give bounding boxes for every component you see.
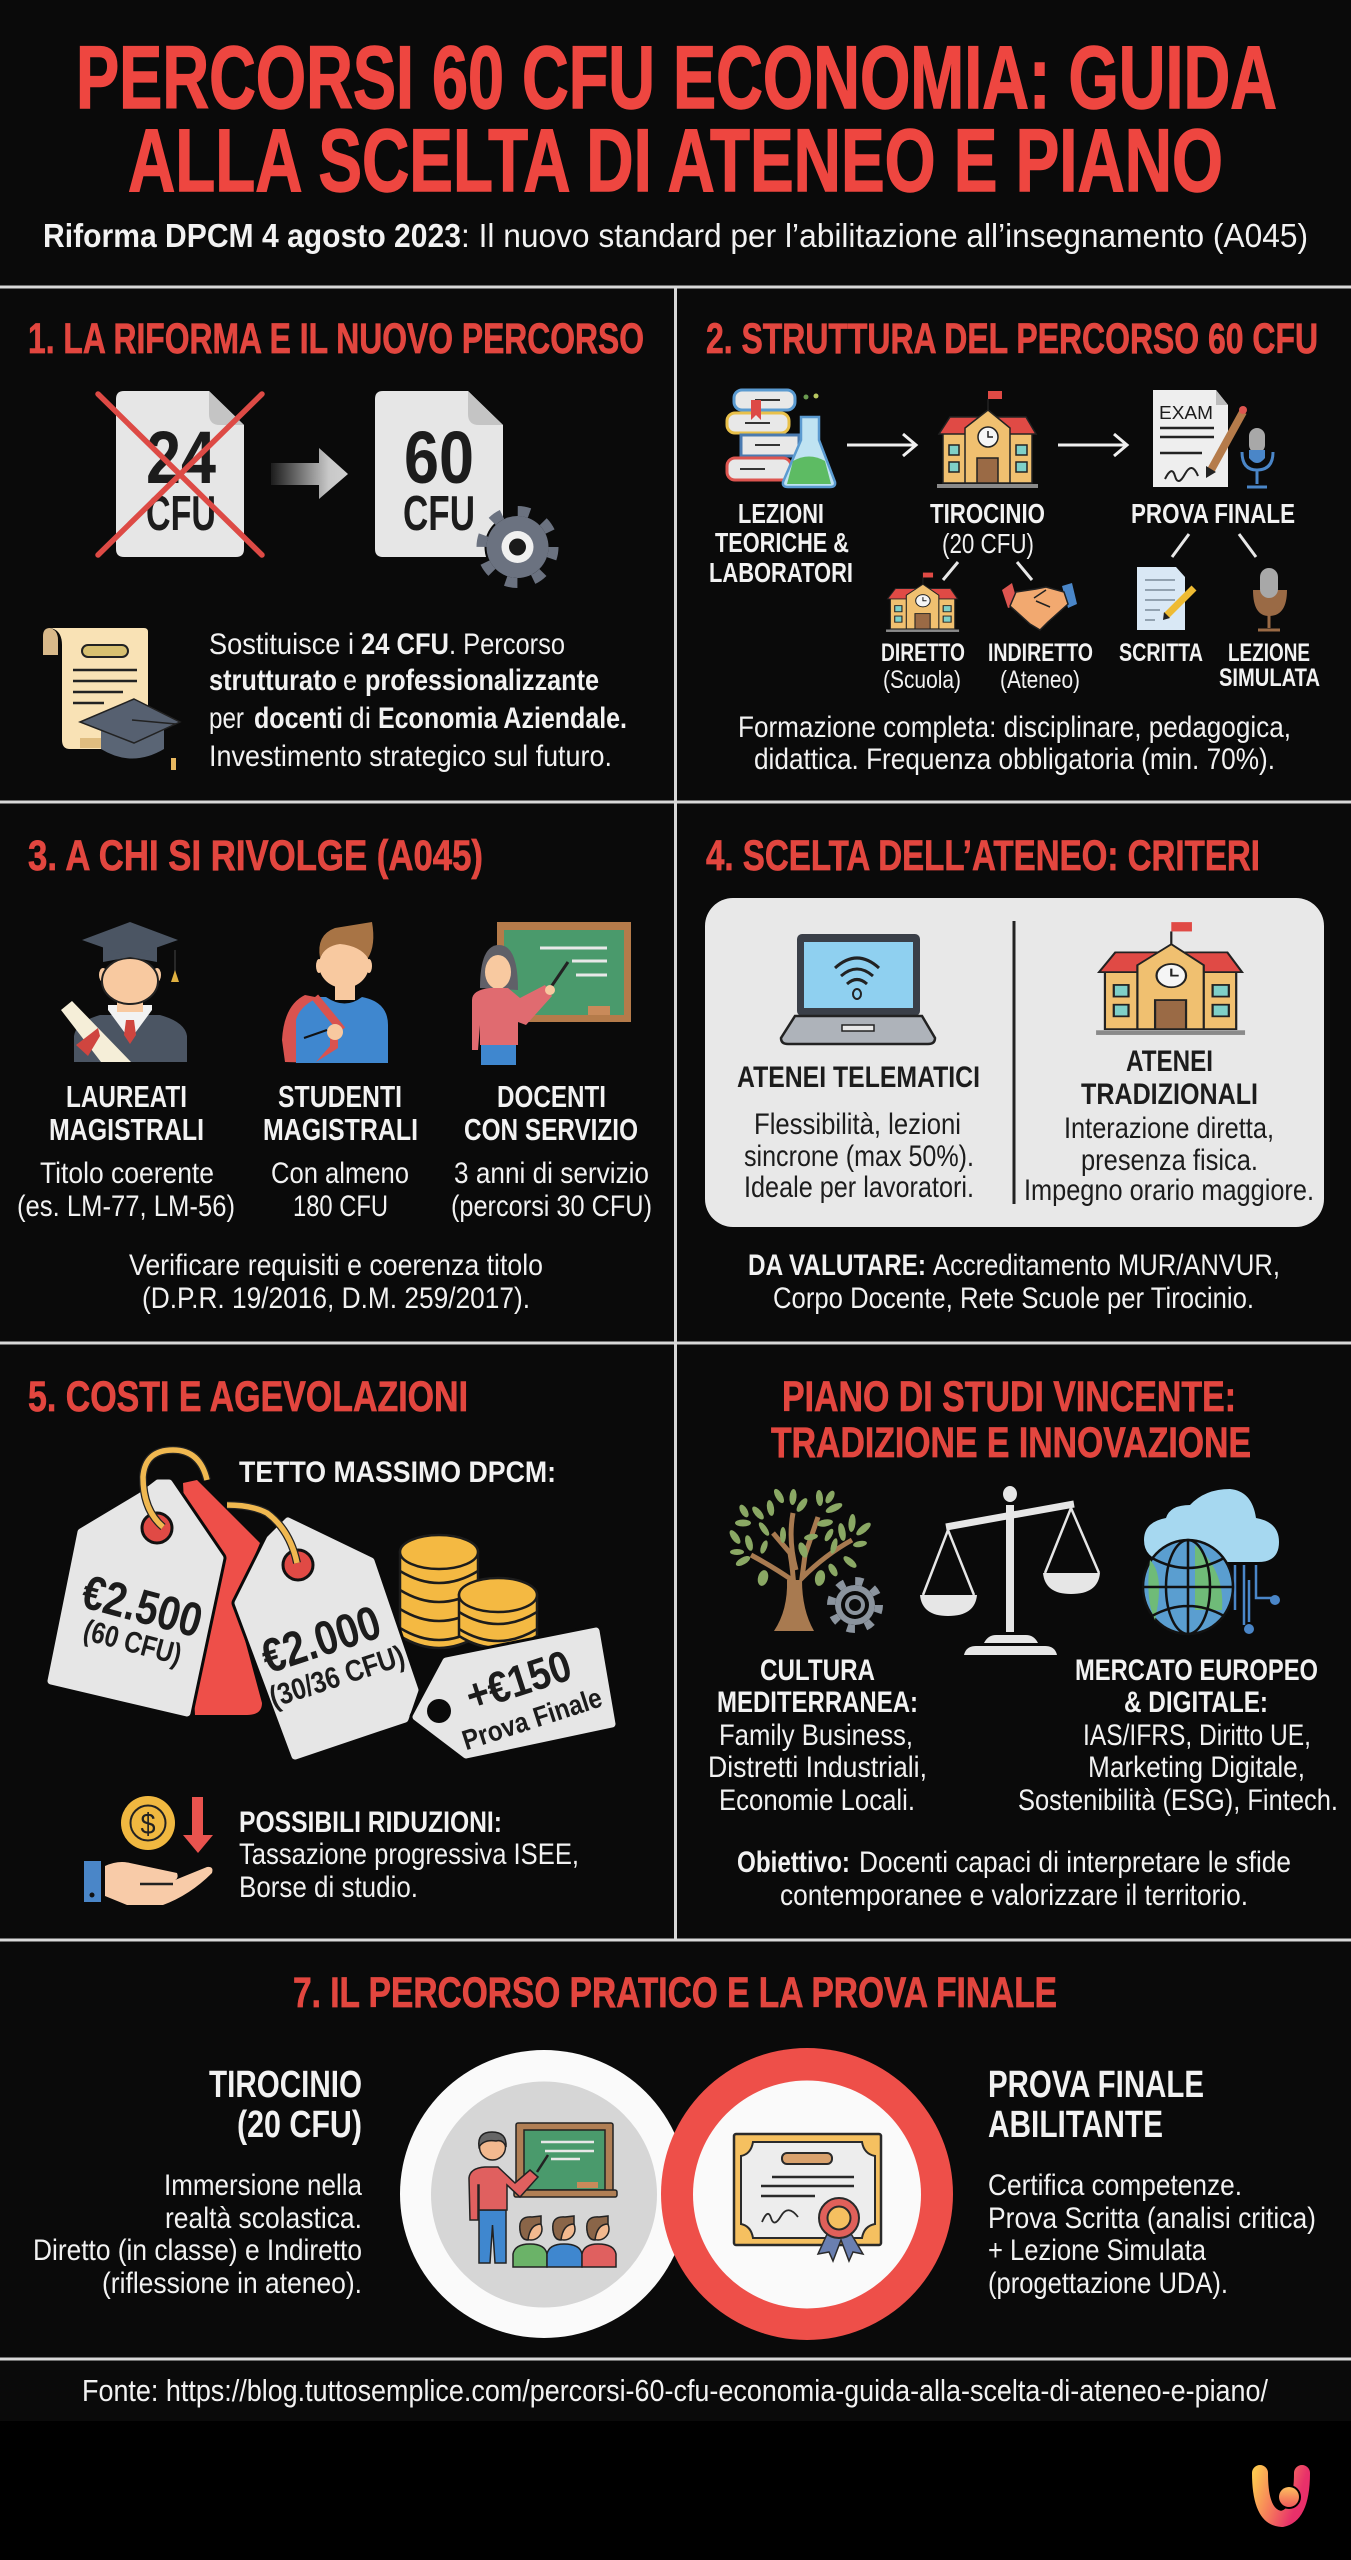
icon: coin, arrow, hand (84, 1796, 213, 1905)
heading 5: 5. COSTI E AGEVOLAZIONI (28, 1373, 468, 1421)
column: mercato europeo: Marketing Digitale, (1088, 1751, 1305, 1784)
persona: studenti: Con almeno (271, 1157, 409, 1190)
option: telematici: sincrone (max 50%). (744, 1140, 974, 1173)
label: lezioni (709, 498, 853, 588)
text: tirocinio: Immersione nella (164, 2169, 362, 2202)
arrow (271, 448, 348, 499)
text: prova finale abilitante: (progettazione UDA). (988, 2267, 1228, 2300)
option: tradizionali: ATENEI (1126, 1045, 1213, 1078)
note: da valutare (748, 1249, 1280, 1315)
persona: laureati (17, 1079, 235, 1223)
icon: tree and gear (728, 1487, 879, 1631)
label: prova finale: PROVA FINALE (1131, 498, 1295, 529)
text block: strutturato (209, 664, 337, 697)
heading 3: 3. A CHI SI RIVOLGE (A045) (28, 832, 483, 880)
text: riduzioni: Tassazione progressiva ISEE, (239, 1838, 579, 1871)
logo (1260, 2473, 1302, 2519)
text: prova finale abilitante: Prova Scritta (analisi critica) (988, 2202, 1316, 2235)
label: lezione simulata: LEZIONE (1228, 639, 1310, 667)
persona: laureati: LAUREATI (66, 1079, 187, 1114)
note: da valutare: Corpo Docente, Rete Scuole per Tirocinio. (773, 1282, 1254, 1315)
column: cultura mediterranea: Distretti Industriali, (708, 1751, 927, 1784)
heading 7: 7. IL PERCORSO PRATICO E LA PROVA FINALE (293, 1969, 1057, 2017)
persona: studenti (263, 1079, 418, 1223)
persona: docenti (451, 1079, 652, 1223)
text: prova finale abilitante: + Lezione Simulata (988, 2234, 1206, 2267)
icon: teacher and students (469, 2123, 617, 2267)
label: indiretto: (Ateneo) (1000, 666, 1080, 694)
icon: crossed 24 CFU document (98, 391, 262, 557)
text: prova finale abilitante: PROVA FINALE (988, 2064, 1204, 2106)
persona: studenti: STUDENTI (278, 1079, 402, 1114)
text block: 24 CFU (361, 628, 449, 661)
tag: red back (183, 1480, 262, 1715)
option: tradizionali: TRADIZIONALI (1081, 1078, 1258, 1111)
card: comparison (705, 898, 1324, 1227)
persona: docenti: 3 anni di servizio (454, 1157, 649, 1190)
icon: crossed 24 CFU document: 24 (146, 416, 216, 499)
tag: 2500: (60 CFU) (80, 1614, 185, 1672)
label: diretto: DIRETTO (881, 639, 965, 667)
text: tirocinio: (20 CFU) (237, 2104, 362, 2146)
option: tradizionali: presenza fisica. (1081, 1144, 1258, 1177)
panel: 7 percorso pratico (33, 1969, 1316, 2340)
tag: 150: Prova Finale (458, 1682, 606, 1756)
text block: . Percorso (449, 628, 565, 661)
icon: small document and pencil (1137, 567, 1194, 630)
arrow (1058, 434, 1127, 456)
column: cultura mediterranea: MEDITERRANEA: (717, 1686, 918, 1719)
label: lezioni: LABORATORI (709, 557, 853, 588)
panel: 3 a chi si rivolge (17, 832, 652, 1315)
note: da valutare: Accreditamento MUR/ANVUR, (933, 1249, 1280, 1282)
icon: laptop with wifi (781, 934, 935, 1044)
text block: di (349, 702, 371, 735)
icon: exam sheet, pencil, microphone: EXAM (1159, 403, 1213, 423)
note: obiettivo (737, 1846, 1291, 1912)
column: cultura mediterranea: CULTURA (760, 1654, 875, 1687)
tag: 2000 (227, 1505, 415, 1756)
icon: graduate (61, 922, 187, 1062)
text block: docenti (254, 702, 343, 735)
text: prova finale abilitante: Certifica competenze. (988, 2169, 1242, 2202)
icon: crossed 24 CFU document: CFU (146, 487, 216, 541)
icon: university (1096, 922, 1245, 1035)
panel: 4 scelta ateneo (705, 832, 1324, 1315)
tag: 150 (416, 1631, 612, 1756)
note: obiettivo: Docenti capaci di interpretare le sfide (859, 1846, 1291, 1879)
text block: per (209, 702, 244, 735)
persona: laureati: MAGISTRALI (49, 1112, 204, 1147)
icon: 60 CFU document with gear (375, 391, 554, 583)
icon: coins (400, 1535, 537, 1648)
label: scritta: SCRITTA (1119, 639, 1203, 667)
heading 6 (771, 1373, 1251, 1467)
icon: small school (886, 573, 959, 632)
column: cultura mediterranea: Family Business, (719, 1719, 913, 1752)
note: da valutare: DA VALUTARE: (748, 1249, 926, 1282)
text block: Investimento strategico sul futuro. (209, 740, 612, 773)
tag: 2000: €2.000 (255, 1596, 387, 1684)
label: lezioni: LEZIONI (738, 498, 824, 529)
icon: books and flask (727, 390, 835, 487)
subtitle: : Il nuovo standard per l’abilitazione all’insegnamento (A045) (461, 217, 1308, 254)
text: tirocinio: TIROCINIO (209, 2064, 362, 2106)
icon: 60 CFU document with gear: 60 (404, 416, 474, 499)
persona: laureati: Titolo coerente (40, 1157, 214, 1190)
icon: student (282, 922, 388, 1063)
icon: certificate (734, 2134, 881, 2261)
label: diretto (881, 639, 965, 694)
text: prova finale abilitante (988, 2064, 1316, 2300)
text: prova finale abilitante: ABILITANTE (988, 2104, 1163, 2146)
tag: 2000: (30/36 CFU) (265, 1640, 409, 1714)
option: telematici (737, 1061, 980, 1204)
column: mercato europeo: & DIGITALE: (1124, 1686, 1268, 1719)
label: lezione simulata (1219, 639, 1320, 692)
panel: 2 struttura (706, 315, 1320, 776)
icon: coin, arrow, hand: $ (140, 1808, 156, 1841)
title (76, 27, 1277, 210)
persona: docenti: DOCENTI (497, 1079, 606, 1114)
option: tradizionali (1024, 1045, 1314, 1207)
label: tirocinio: (20 CFU) (942, 528, 1034, 559)
persona: docenti: (percorsi 30 CFU) (451, 1190, 652, 1223)
label: tirocinio (930, 498, 1045, 559)
icon: diploma and cap (43, 628, 180, 770)
text block (209, 628, 627, 773)
panel: 1 la riforma (28, 315, 644, 773)
persona: laureati: (es. LM-77, LM-56) (17, 1190, 235, 1223)
label: lezione simulata: SIMULATA (1219, 664, 1320, 692)
subtitle (43, 217, 1308, 254)
text: riduzioni (239, 1806, 579, 1904)
text block (738, 711, 1291, 776)
column: mercato europeo (1018, 1654, 1338, 1817)
icon: school (937, 391, 1038, 488)
note (129, 1249, 543, 1315)
note: (D.P.R. 19/2016, D.M. 259/2017). (142, 1282, 530, 1315)
label: lezioni: TEORICHE & (715, 527, 849, 558)
option: telematici: Ideale per lavoratori. (744, 1171, 974, 1204)
icon: exam sheet, pencil, microphone (1153, 390, 1273, 487)
option: telematici: ATENEI TELEMATICI (737, 1061, 980, 1094)
label: diretto: (Scuola) (883, 666, 961, 694)
icon: small microphone (1255, 568, 1285, 630)
persona: docenti: CON SERVIZIO (464, 1112, 638, 1147)
label: tirocinio: TIROCINIO (930, 498, 1045, 529)
column: cultura mediterranea: Economie Locali. (719, 1784, 915, 1817)
note: obiettivo: contemporanee e valorizzare il territorio. (780, 1879, 1248, 1912)
text: riduzioni: Borse di studio. (239, 1871, 418, 1904)
text: tirocinio: realtà scolastica. (165, 2202, 362, 2235)
icon: balance (920, 1486, 1100, 1655)
text: riduzioni: POSSIBILI RIDUZIONI: (239, 1806, 502, 1839)
arrow (847, 434, 916, 456)
persona: studenti: MAGISTRALI (263, 1112, 418, 1147)
label: tetto massimo: TETTO MASSIMO DPCM: (239, 1456, 556, 1489)
text block: Sostituisce i (209, 628, 354, 661)
text: tirocinio (33, 2064, 362, 2300)
text block: Economia Aziendale. (378, 702, 627, 735)
heading 1: 1. LA RIFORMA E IL NUOVO PERCORSO (28, 315, 644, 363)
icon: 60 CFU document with gear: CFU (403, 487, 475, 541)
icon: handshake (1002, 583, 1077, 630)
panel: 5 costi (28, 1373, 612, 1905)
text block: professionalizzante (365, 664, 599, 697)
subtitle: Riforma DPCM 4 agosto 2023 (43, 217, 461, 254)
note: obiettivo: Obiettivo: (737, 1846, 850, 1879)
column: cultura mediterranea (708, 1654, 927, 1817)
text: tirocinio: (riflessione in ateneo). (102, 2267, 362, 2300)
heading 6: PIANO DI STUDI VINCENTE: (782, 1373, 1236, 1421)
panel: piano di studi (708, 1373, 1338, 1912)
tag: 150: +€150 (460, 1641, 577, 1721)
label: indiretto (988, 639, 1093, 694)
tag: 2500 (51, 1450, 220, 1713)
text block: didattica. Frequenza obbligatoria (min. 70%). (754, 743, 1275, 776)
label: indiretto: INDIRETTO (988, 639, 1093, 667)
circle: tirocinio (400, 2050, 688, 2338)
option: tradizionali: Interazione diretta, (1064, 1112, 1274, 1145)
text: tirocinio: Diretto (in classe) e Indiretto (33, 2234, 362, 2267)
icon: teacher at board (472, 922, 631, 1065)
persona: studenti: 180 CFU (293, 1190, 388, 1223)
tag: 2500: €2.500 (76, 1566, 208, 1648)
icon: cloud and globe (1143, 1489, 1280, 1634)
option: telematici: Flessibilità, lezioni (754, 1108, 961, 1141)
text block: e (343, 664, 357, 697)
circle: prova finale (661, 2048, 953, 2340)
note: Verificare requisiti e coerenza titolo (129, 1249, 543, 1282)
